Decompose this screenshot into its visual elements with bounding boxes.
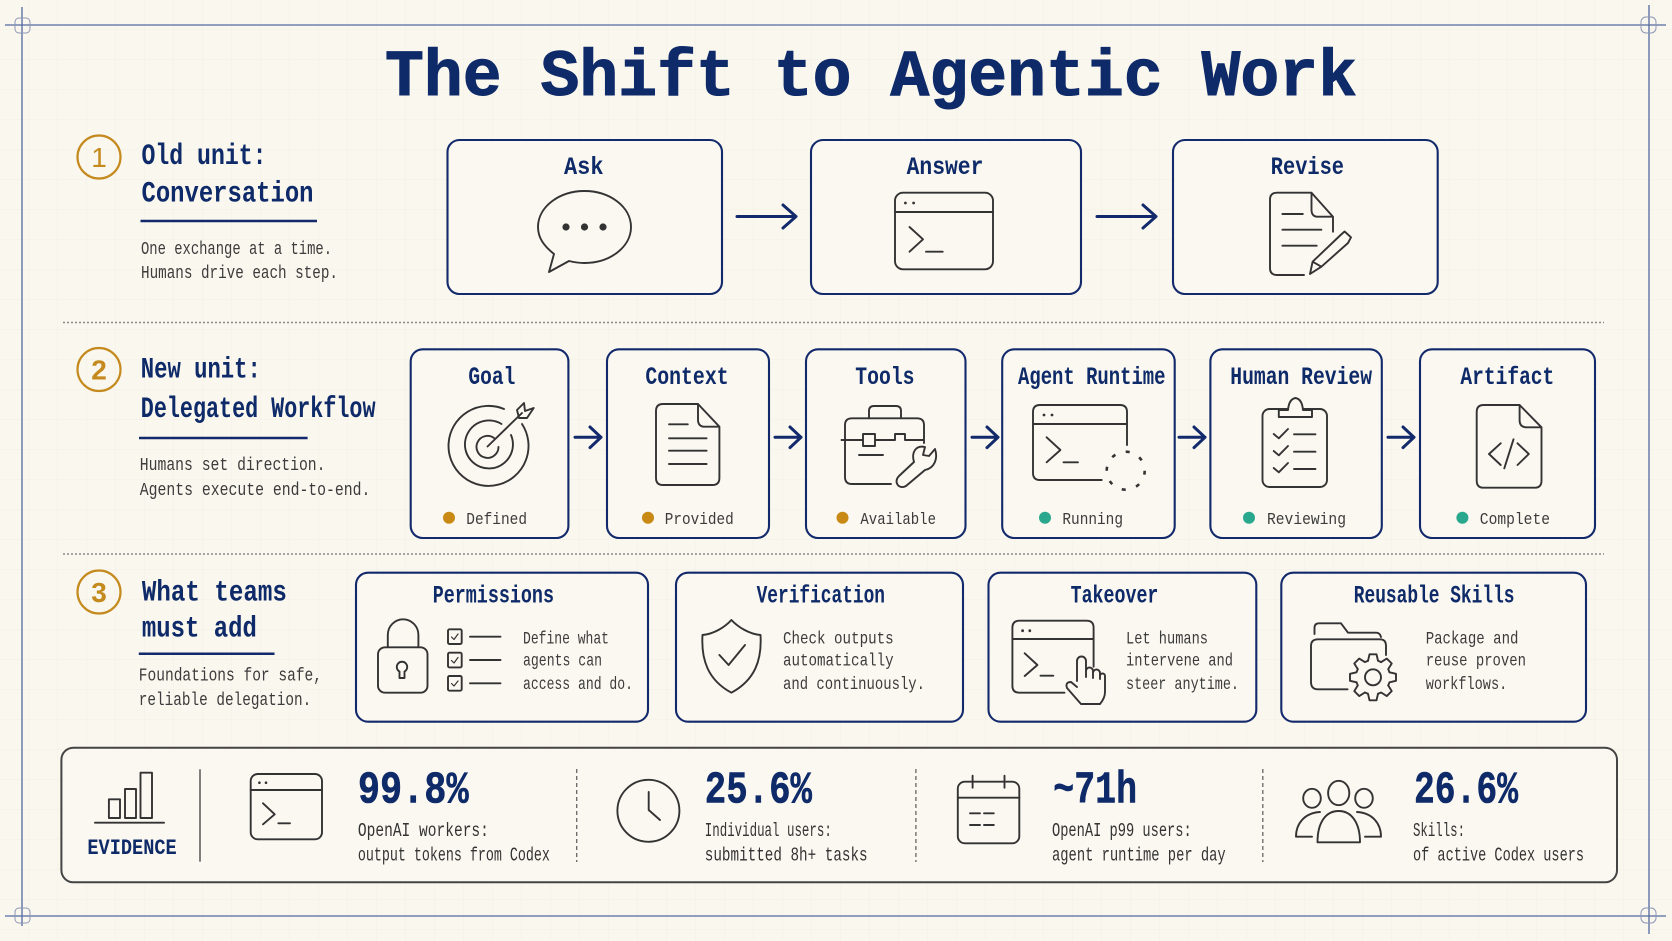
heading: old unit: Old unit:: [142, 140, 266, 174]
title: The Shift to Agentic Work: [385, 40, 1357, 115]
status: running: Running: [1062, 511, 1123, 530]
heading: new unit: [141, 354, 376, 427]
arrow: [1179, 427, 1205, 448]
card text: reuse proven: [1426, 652, 1526, 672]
icon: terminal and hand: [1012, 621, 1105, 704]
stat: 99.8%: [251, 766, 550, 867]
description: Humans drive each step.: [141, 263, 338, 284]
description: [139, 666, 322, 711]
icon: toolbox and wrench: [842, 406, 936, 487]
status: reviewing: [1243, 511, 1346, 530]
card: Reusable Skills: Reusable Skills: [1354, 582, 1514, 611]
icon: target: [449, 403, 534, 486]
card: Agent Runtime: Agent Runtime: [1018, 363, 1166, 392]
description: One exchange at a time.: [141, 239, 332, 260]
card: Ask: Ask: [564, 153, 604, 182]
arrow: [575, 427, 601, 448]
card: Artifact: [1420, 349, 1595, 538]
stat: 26.6%: [1296, 766, 1584, 867]
card: Human Review: Human Review: [1230, 363, 1372, 392]
stat: 26.6%: Skills:: [1413, 820, 1465, 842]
stat: 25.6%: 25.6%: [705, 766, 813, 817]
card text: automatically: [783, 652, 894, 672]
icon: document: [656, 404, 719, 485]
status: complete: Complete: [1480, 511, 1550, 530]
heading: what teams must add: What teams: [142, 577, 287, 611]
card: Tools: [806, 349, 966, 538]
stat: 25.6%: submitted 8h+ tasks: [705, 845, 868, 867]
arrow: [1388, 427, 1414, 448]
heading rule: [139, 652, 274, 655]
card text: and continuously.: [783, 675, 925, 695]
badge 3: [78, 570, 120, 614]
heading: what teams must add: must add: [142, 613, 257, 647]
panel: evidence: [61, 748, 1617, 882]
section 2: new unit: [78, 348, 1595, 538]
arrow: [775, 427, 801, 448]
status: defined: [443, 511, 527, 530]
card: Permissions: Permissions: [433, 582, 554, 611]
stat: 26.6%: of active Codex users: [1413, 845, 1584, 867]
status: provided: Provided: [665, 511, 734, 530]
card: Permissions: [356, 573, 648, 722]
card: Revise: Revise: [1271, 153, 1344, 182]
card: Context: Context: [645, 363, 729, 392]
card: Agent Runtime: [1002, 349, 1175, 538]
badge 2: 2: [91, 354, 107, 386]
icon: bar chart: [95, 773, 164, 823]
card text: Package and: [1426, 629, 1518, 649]
status: available: Available: [860, 511, 936, 530]
card: Tools: Tools: [855, 363, 914, 392]
icon: calendar: [958, 776, 1019, 843]
heading: what teams must add: [142, 577, 287, 647]
stat: 25.6%: Individual users:: [705, 820, 832, 842]
status: available: [836, 511, 936, 530]
card: Context: [607, 349, 769, 538]
card: Ask: [448, 140, 722, 294]
badge 1: [78, 136, 120, 178]
stat: 99.8%: 99.8%: [358, 766, 469, 817]
card: Takeover: [988, 573, 1256, 722]
card: Artifact: Artifact: [1460, 363, 1554, 392]
icon: people: [1296, 781, 1381, 842]
icon: shield check: [702, 620, 761, 693]
description: Agents execute end-to-end.: [140, 480, 370, 501]
card text: [1426, 629, 1526, 695]
evidence label: EVIDENCE: [87, 836, 177, 861]
heading: new unit: Delegated Workflow: [141, 393, 376, 427]
badge 3: 3: [91, 577, 107, 608]
card text: Define what: [523, 629, 609, 649]
badge 1: 1: [91, 142, 107, 173]
description: [140, 455, 370, 501]
stat: ~71h: agent runtime per day: [1052, 845, 1226, 867]
icon: speech bubble: [538, 191, 631, 272]
section 1: old unit: [78, 136, 1438, 294]
separator: [63, 322, 1604, 324]
card text: workflows.: [1426, 675, 1507, 695]
card text: [1126, 629, 1239, 695]
heading rule: [140, 220, 317, 222]
stat: 25.6%: [617, 766, 868, 867]
description: reliable delegation.: [139, 690, 311, 711]
status: complete: [1456, 511, 1550, 530]
card: Answer: [811, 140, 1081, 294]
card: Takeover: Takeover: [1071, 582, 1158, 611]
icon: terminal: [895, 193, 993, 269]
icon: terminal: [251, 774, 322, 839]
icon: clock: [617, 780, 679, 842]
icon: terminal running: [1033, 405, 1145, 490]
icon: folder and gear: [1311, 623, 1396, 700]
card: Answer: Answer: [907, 153, 983, 182]
card: Human Review: [1210, 349, 1382, 538]
status: defined: Defined: [466, 511, 527, 530]
heading: new unit: New unit:: [141, 354, 261, 388]
icon: clipboard checklist: [1262, 398, 1327, 487]
separator: [63, 553, 1604, 555]
section 3: what teams must add: [78, 570, 1586, 722]
badge 2: [78, 348, 120, 391]
card: Verification: [676, 573, 963, 722]
description: Humans set direction.: [140, 455, 326, 476]
card: Goal: Goal: [468, 363, 515, 392]
status: reviewing: Reviewing: [1267, 511, 1346, 530]
card text: access and do.: [523, 675, 633, 695]
stat: ~71h: OpenAI p99 users:: [1052, 820, 1192, 842]
stat: 26.6%: 26.6%: [1414, 766, 1519, 817]
card text: Check outputs: [783, 629, 894, 649]
stat: 99.8%: OpenAI workers:: [358, 820, 489, 842]
arrow: [972, 427, 998, 448]
card text: steer anytime.: [1126, 675, 1239, 695]
stat: 99.8%: output tokens from Codex: [358, 845, 550, 867]
description: Foundations for safe,: [139, 666, 322, 687]
card: Revise: [1173, 140, 1438, 294]
status: provided: [642, 511, 734, 530]
arrow: [737, 205, 796, 228]
card text: intervene and: [1126, 652, 1233, 672]
card: Verification: Verification: [757, 582, 885, 611]
card text: [783, 629, 925, 695]
stat: ~71h: [958, 766, 1226, 867]
heading: old unit: Conversation: [142, 178, 314, 212]
card text: agents can: [523, 652, 602, 672]
description: [141, 239, 338, 284]
card text: [523, 629, 633, 695]
card text: Let humans: [1126, 629, 1208, 649]
stat: ~71h: ~71h: [1053, 766, 1137, 817]
icon: document and pencil: [1270, 193, 1351, 275]
icon: code file: [1477, 405, 1542, 488]
status: running: [1039, 511, 1123, 530]
icon: lock and checklist: [378, 619, 500, 693]
heading rule: [139, 437, 308, 439]
card: Reusable Skills: [1281, 573, 1586, 722]
arrow: [1097, 205, 1156, 228]
card: Goal: [411, 349, 568, 538]
heading: old unit: [142, 140, 314, 212]
